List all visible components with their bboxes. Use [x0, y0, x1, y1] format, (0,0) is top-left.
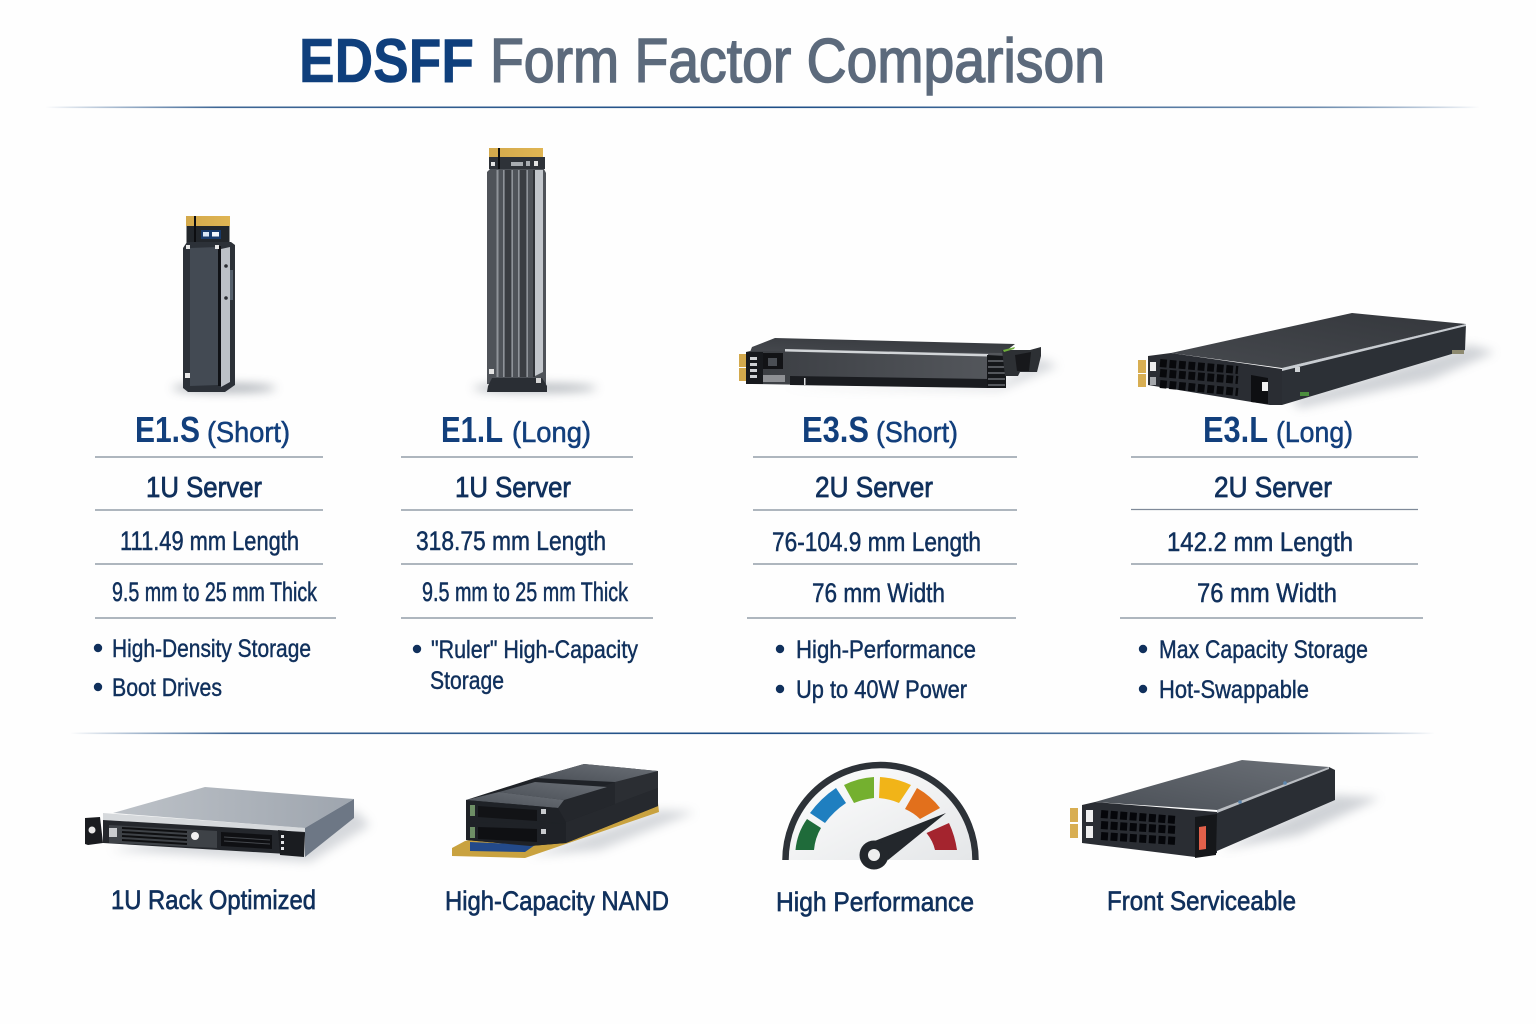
icon: E1.L drive: [473, 148, 597, 392]
server size: 1U Server: [455, 472, 571, 504]
feature list: Storage: [430, 667, 504, 695]
icon: front-serviceable drive: [1070, 760, 1380, 858]
length: 111.49 mm Length: [120, 526, 299, 556]
thickness: 9.5 mm to 25 mm Thick: [422, 577, 628, 607]
length: 142.2 mm Length: [1167, 527, 1353, 557]
feature list: Boot Drives: [112, 674, 222, 702]
server size: 1U Server: [146, 472, 262, 504]
icon: 1U rack server: [85, 787, 370, 862]
icon: stacked NAND drives: [452, 764, 695, 858]
width: 76 mm Width: [1197, 578, 1337, 608]
feature list: [94, 635, 311, 702]
panel: Front Serviceable: [1070, 760, 1380, 916]
length: 76-104.9 mm Length: [772, 527, 981, 557]
length: 318.75 mm Length: [416, 526, 606, 556]
heading: E3.L: [1203, 409, 1353, 450]
feature list: [413, 636, 638, 695]
label: High Performance: [776, 887, 974, 917]
title: [299, 27, 1105, 96]
heading: E1.S: (Short): [207, 417, 290, 449]
heading: E1.S: E1.S: [135, 409, 200, 450]
heading: E3.S: E3.S: [802, 409, 869, 450]
feature list: Hot-Swappable: [1159, 676, 1309, 704]
heading: E3.S: (Short): [876, 417, 958, 449]
heading: E3.S: [802, 409, 958, 450]
heading: E1.L: E1.L: [441, 409, 503, 450]
title: Form Factor Comparison: [490, 27, 1105, 96]
panel: High Performance: [776, 765, 976, 917]
server size: 2U Server: [1214, 472, 1332, 504]
feature list: High-Density Storage: [112, 635, 311, 663]
feature list: [776, 636, 976, 704]
feature list: Up to 40W Power: [796, 676, 967, 704]
icon: E3.L drive: [1138, 313, 1495, 408]
panel: E1.L: [401, 148, 653, 695]
feature list: High-Performance: [796, 636, 976, 664]
panel: E1.S: [94, 216, 336, 702]
label: Front Serviceable: [1107, 886, 1296, 916]
thickness: 9.5 mm to 25 mm Thick: [112, 577, 317, 607]
heading: E1.L: (Long): [512, 417, 591, 449]
icon: E1.S drive: [172, 216, 276, 392]
feature list: [1139, 636, 1368, 704]
label: 1U Rack Optimized: [111, 885, 316, 915]
feature list: "Ruler" High-Capacity: [431, 636, 638, 664]
label: High-Capacity NAND: [445, 886, 669, 916]
heading: E1.L: [441, 409, 591, 450]
server size: 2U Server: [815, 472, 933, 504]
panel: 1U Rack Optimized: [85, 787, 370, 915]
feature list: Max Capacity Storage: [1159, 636, 1368, 664]
panel: E3.L: [1120, 313, 1495, 704]
icon: performance gauge: [786, 765, 976, 870]
heading: E1.S: [135, 409, 290, 450]
icon: E3.S drive: [739, 338, 1058, 390]
panel: High-Capacity NAND: [445, 764, 695, 916]
panel: E3.S: [739, 338, 1058, 704]
heading: E3.L: E3.L: [1203, 409, 1268, 450]
heading: E3.L: (Long): [1276, 417, 1353, 449]
width: 76 mm Width: [812, 578, 945, 608]
title: EDSFF: [299, 27, 474, 96]
